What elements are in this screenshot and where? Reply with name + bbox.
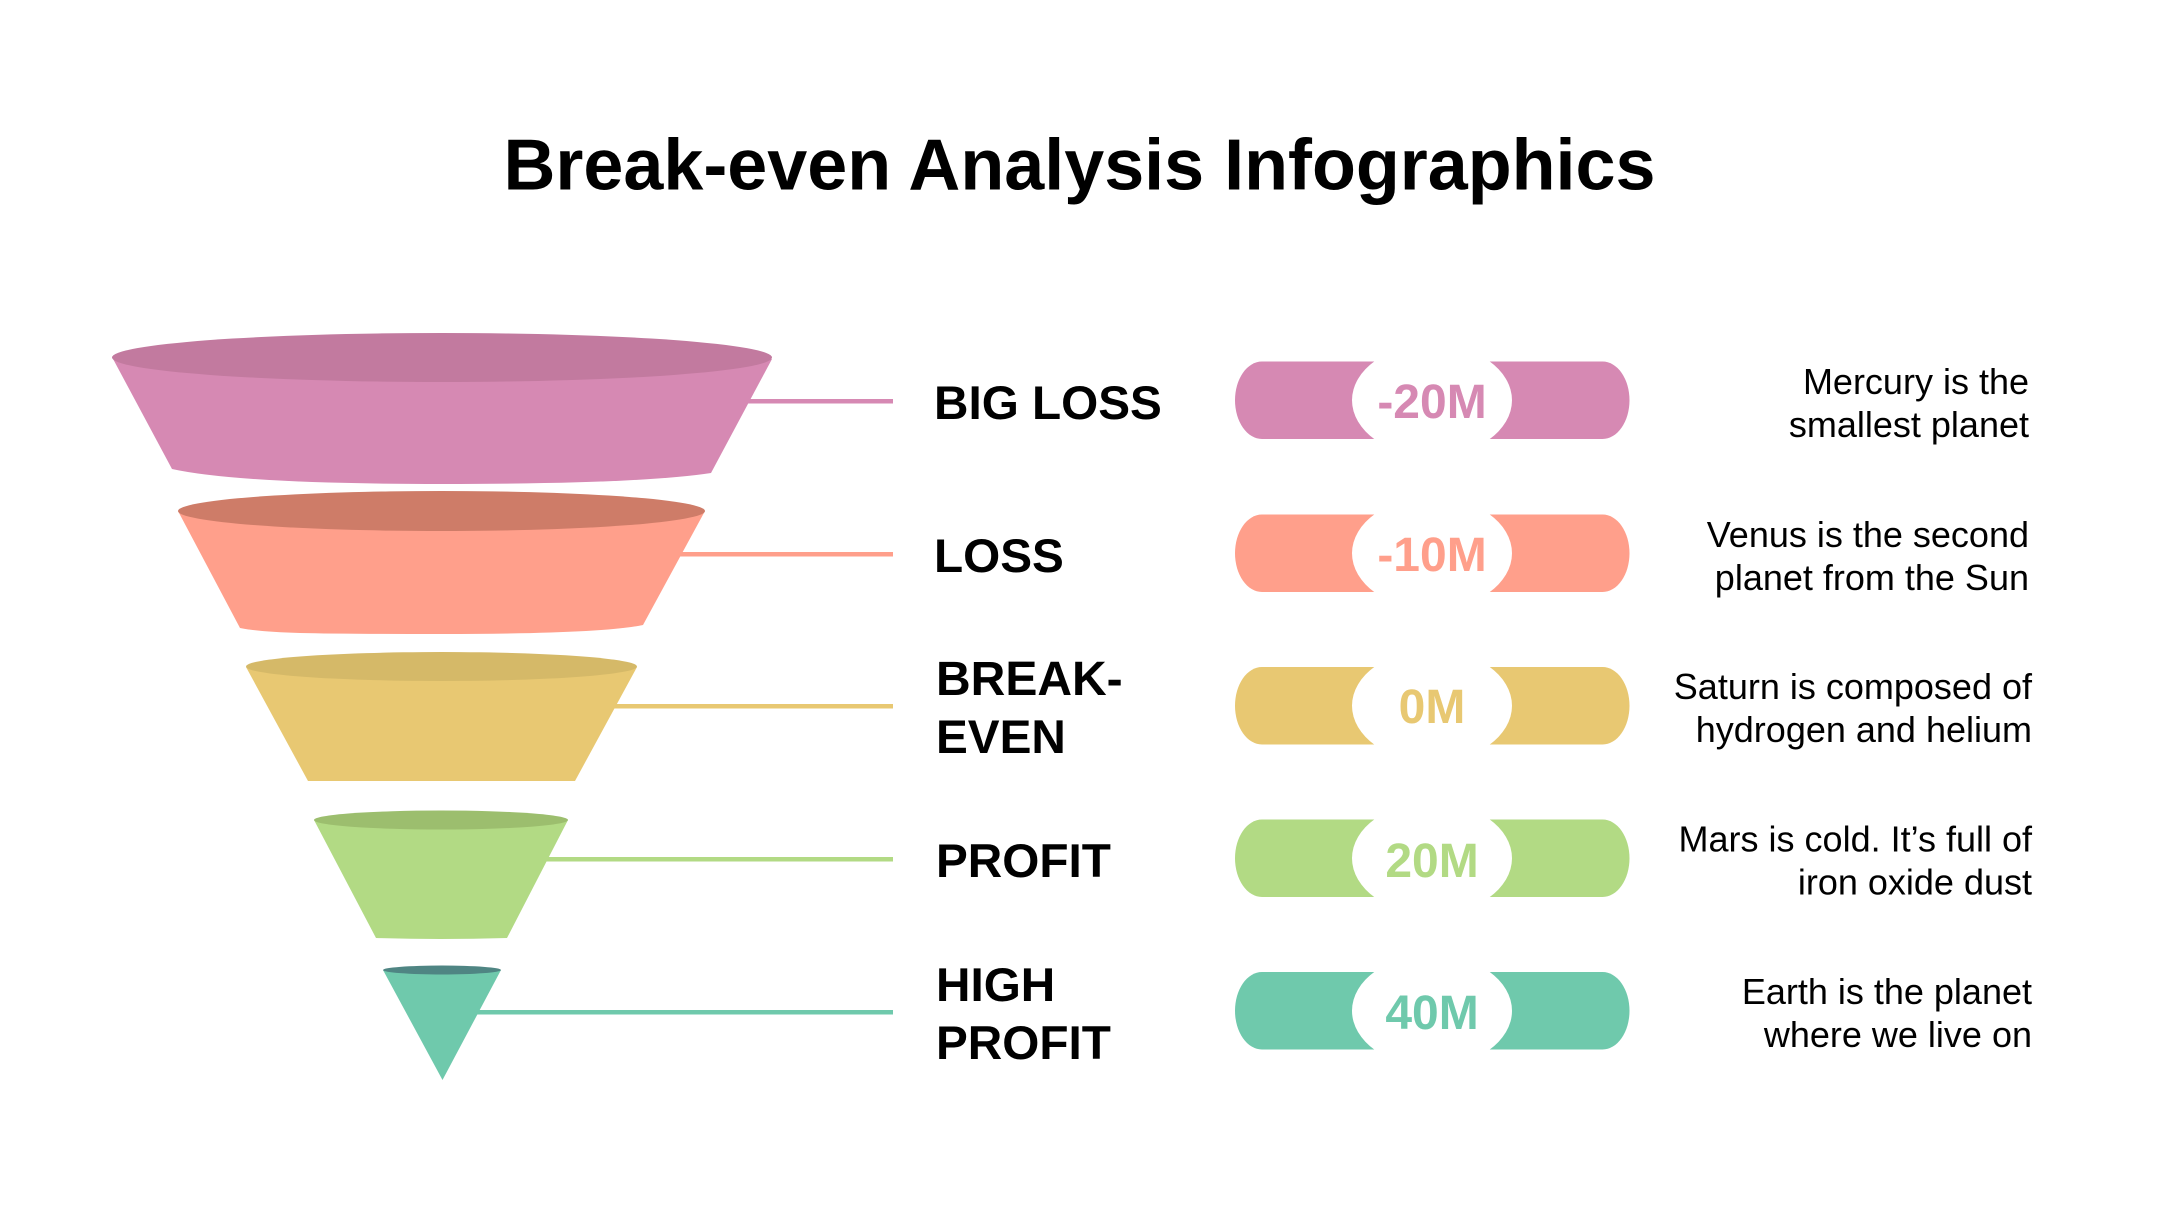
funnel segment: high profit	[383, 966, 501, 1080]
row: big loss	[112, 333, 2029, 484]
label: loss: LOSS	[934, 530, 1064, 583]
description: venus: planet from the Sun	[1715, 557, 2029, 598]
pill: 40M: 40M	[1385, 987, 1479, 1040]
pill: 40M	[1235, 972, 1630, 1050]
label: break-even: EVEN	[936, 711, 1066, 764]
label: high profit: PROFIT	[936, 1017, 1111, 1070]
label: break-even: BREAK-	[936, 653, 1123, 706]
row: loss	[178, 491, 2029, 634]
row: profit	[314, 802, 2033, 939]
description: earth: Earth is the planet	[1742, 971, 2032, 1012]
pill: -10M: -10M	[1377, 529, 1487, 582]
pill: 0M	[1235, 667, 1630, 744]
connector: profit	[545, 857, 893, 862]
description: mercury: Mercury is the	[1803, 361, 2029, 402]
label: profit: PROFIT	[936, 835, 1111, 888]
connector: loss	[670, 552, 893, 556]
description: mercury: smallest planet	[1789, 404, 2029, 445]
pill: -10M	[1235, 514, 1630, 592]
row: break-even	[246, 650, 2033, 781]
description: mars: Mars is cold. It’s full of	[1679, 818, 2033, 860]
pill: -20M: -20M	[1377, 376, 1487, 429]
connector: break-even	[600, 704, 893, 708]
row: high profit	[383, 955, 2032, 1080]
connector: high profit	[475, 1010, 893, 1014]
description: venus: Venus is the second	[1707, 514, 2029, 555]
pill: 20M	[1235, 820, 1630, 897]
label: big loss: BIG LOSS	[934, 377, 1162, 430]
funnel segment: break-even	[246, 652, 637, 781]
funnel segment: loss	[178, 491, 705, 634]
funnel segment: big loss	[112, 333, 772, 484]
description: mars: iron oxide dust	[1798, 862, 2032, 902]
title: Break-even Analysis Infographics	[503, 126, 1656, 206]
pill: -20M	[1235, 362, 1630, 439]
description: saturn: hydrogen and helium	[1696, 709, 2032, 750]
pill: 20M: 20M	[1385, 835, 1479, 888]
description: earth: where we live on	[1763, 1014, 2032, 1055]
pill: 0M: 0M	[1399, 681, 1465, 734]
label: high profit: HIGH	[936, 959, 1055, 1012]
connector: big loss	[740, 399, 893, 404]
funnel segment: profit	[314, 810, 568, 939]
description: saturn: Saturn is composed of	[1674, 666, 2033, 707]
